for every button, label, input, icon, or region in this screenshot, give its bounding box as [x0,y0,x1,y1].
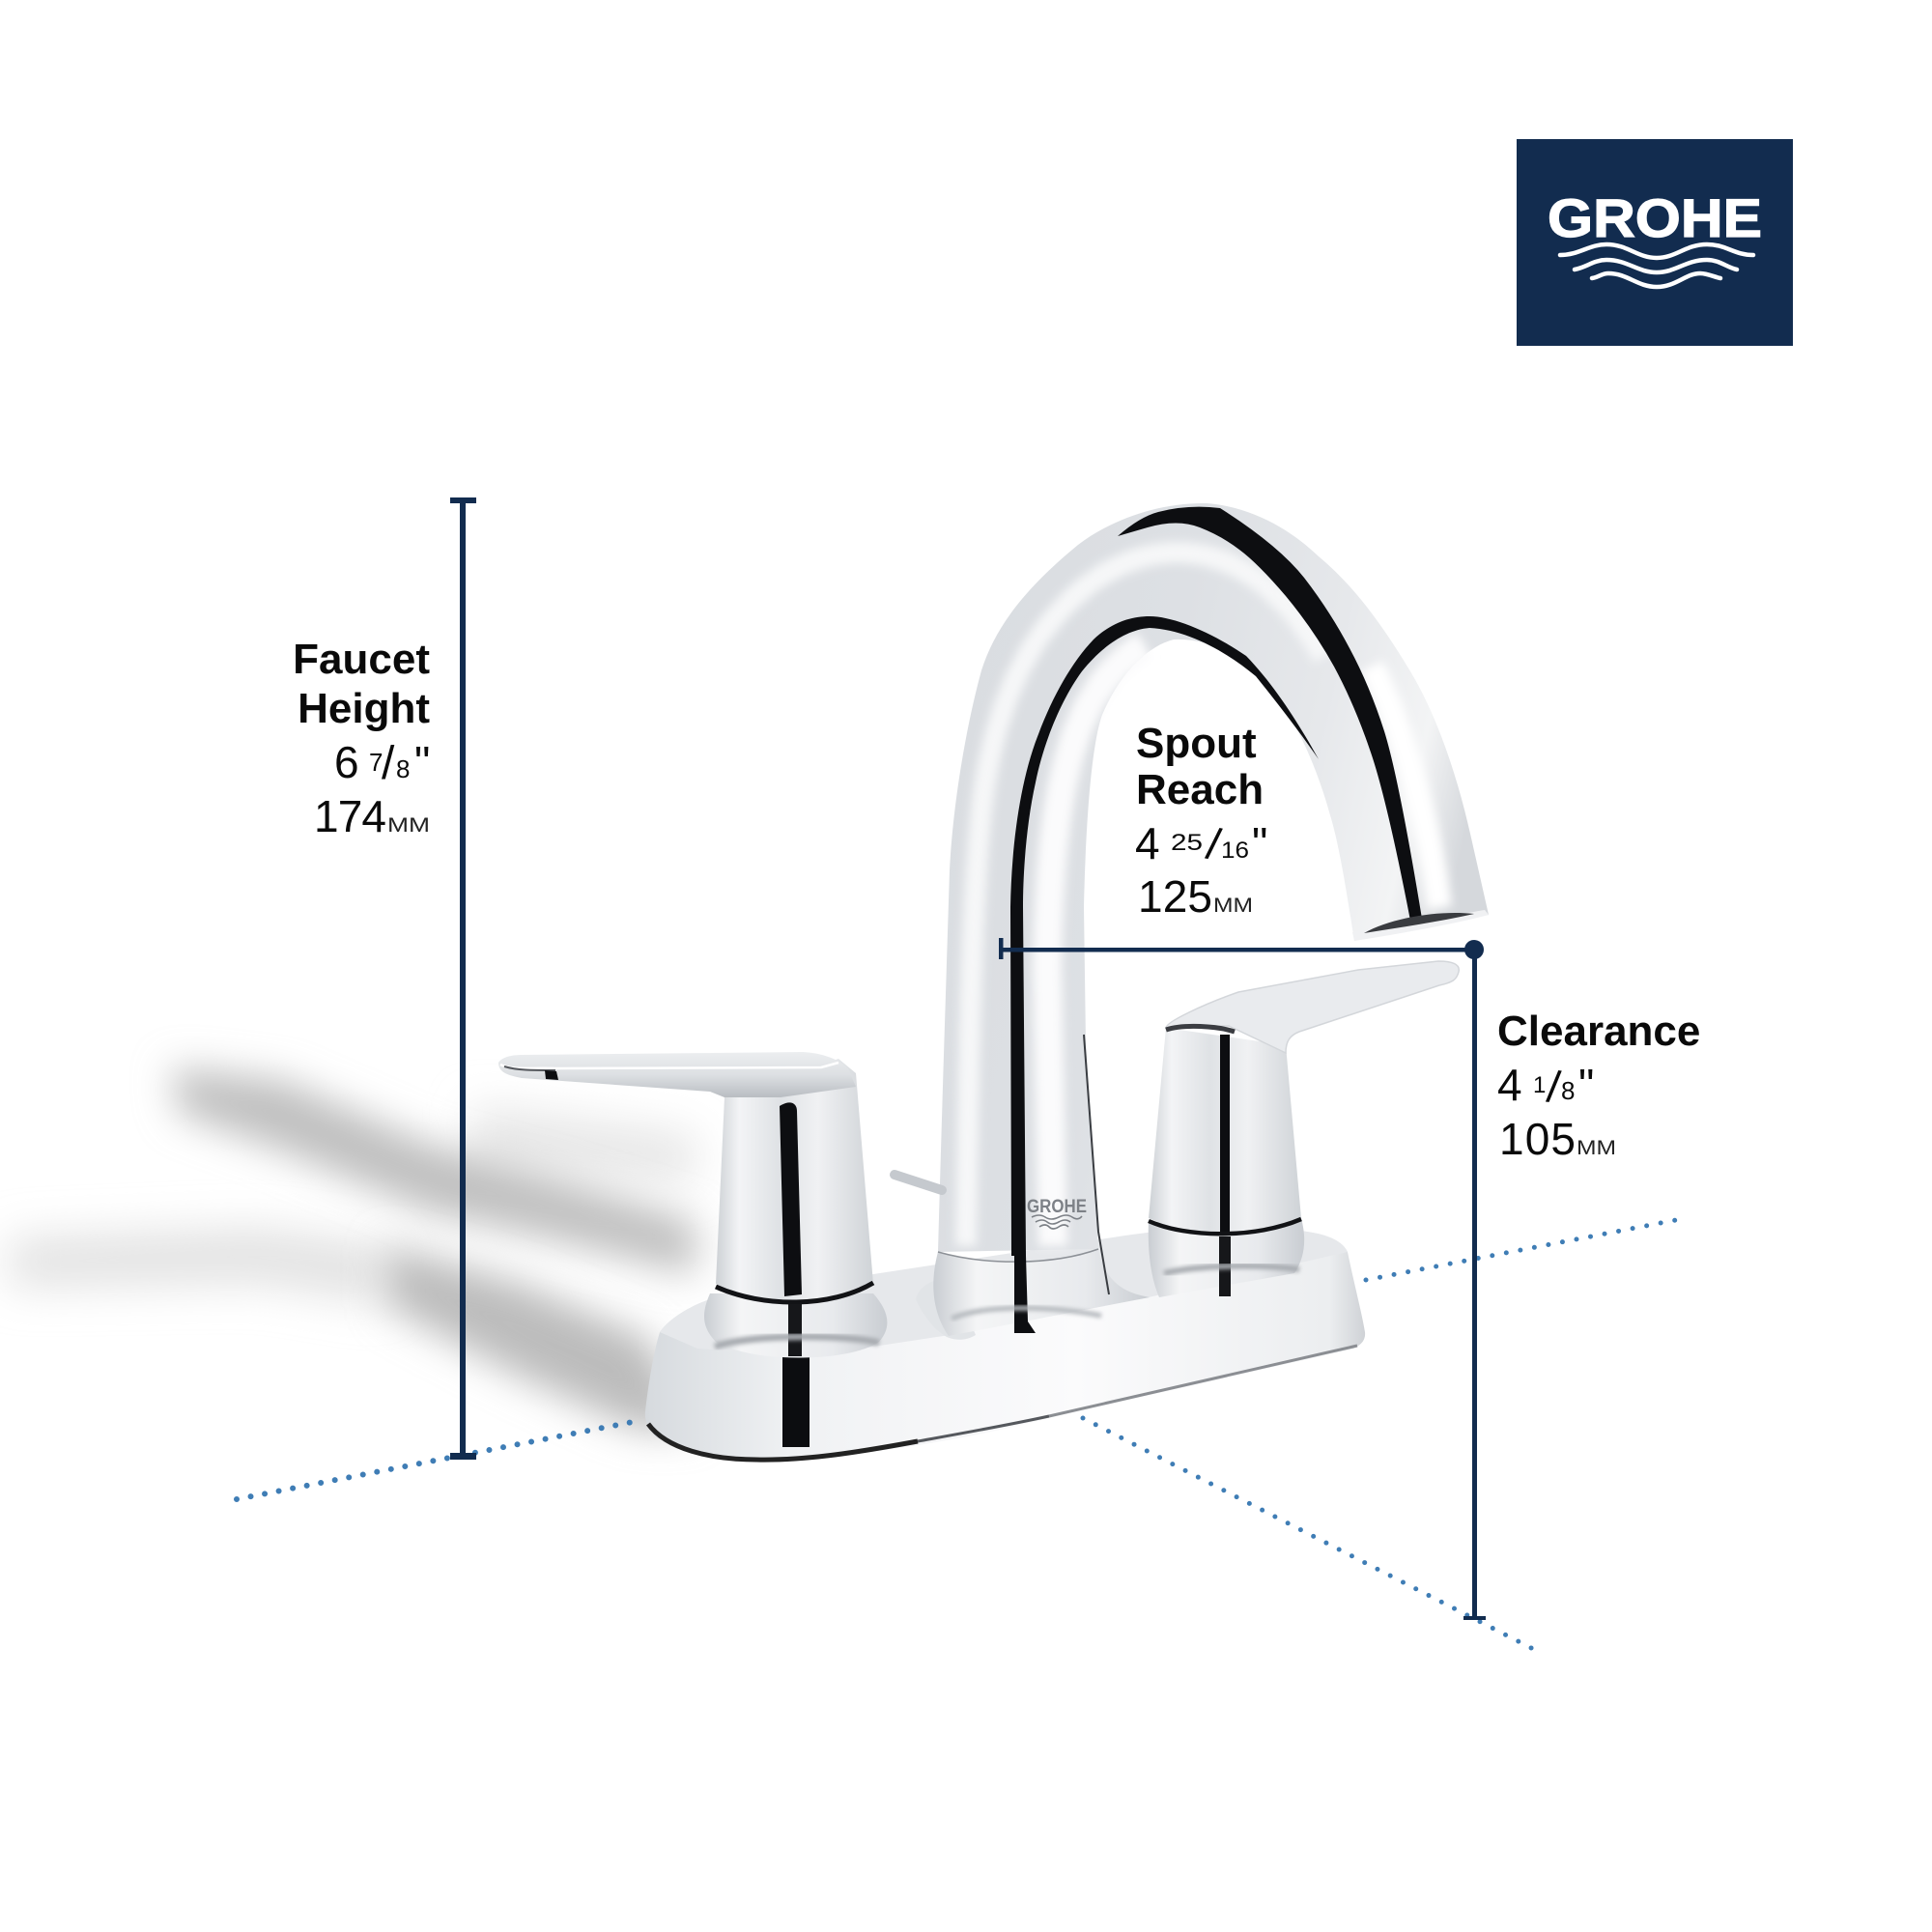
label: faucet height: MM [387,814,430,837]
label: clearance: MM [1577,1137,1616,1159]
label: spout reach: 16 [1221,838,1249,864]
column collar [933,1249,1150,1336]
dimension line: spout reach [999,938,1484,959]
label: spout reach: " [1252,818,1267,868]
dotted floor line: right [1366,1219,1681,1280]
left handle [498,1052,887,1358]
label: clearance: 1 [1533,1072,1546,1098]
label: spout reach: MM [1213,895,1253,917]
deck plate [645,1227,1365,1460]
label: faucet height: / [382,738,395,789]
dimension line: faucet height [450,497,476,1460]
dotted floor line: front [1083,1418,1537,1651]
label: clearance: 105 [1499,1114,1576,1164]
label: spout reach: Spout [1136,720,1257,767]
label: faucet height: " [414,737,430,787]
spout tip [1352,910,1489,941]
label: clearance: / [1545,1061,1563,1113]
label: clearance: 4 [1497,1060,1522,1110]
label: faucet height: 6 [334,737,359,787]
spout outer reflection [1118,507,1422,921]
label: faucet height [293,636,430,841]
label: clearance [1497,1008,1700,1164]
pop-up rod [895,1175,942,1190]
stamped GROHE mark on column: GROHE [1027,1197,1087,1217]
label: faucet height: 8 [396,754,410,783]
cast shadow of faucet [10,1067,696,1430]
right handle [1149,961,1459,1297]
label: spout reach: 25 [1171,830,1203,856]
label: faucet height: 7 [369,748,383,777]
faucet illustration [498,503,1489,1460]
label: spout reach: 4 [1135,818,1160,868]
label: spout reach: / [1203,818,1225,869]
label: faucet height: Faucet [293,636,430,683]
label: clearance: Clearance [1497,1008,1700,1055]
spout and column [916,503,1489,1340]
thin column reflection [1084,1035,1109,1294]
label: faucet height: Height [298,685,430,732]
dotted floor line: left [237,1421,638,1499]
logo: GROHE: GROHE [1548,187,1762,248]
logo: GROHE [1517,139,1793,346]
label: spout reach: Reach [1136,766,1264,813]
spout inner reflection [1010,616,1319,1256]
stamped GROHE mark on column [1027,1197,1087,1229]
label: clearance: " [1578,1060,1594,1110]
column flange [916,1279,976,1340]
label: spout reach: 125 [1138,871,1212,922]
label: faucet height: 174 [314,791,386,841]
label: spout reach [1135,720,1267,922]
dimension line: clearance [1463,950,1486,1620]
label: clearance: 8 [1561,1076,1575,1105]
